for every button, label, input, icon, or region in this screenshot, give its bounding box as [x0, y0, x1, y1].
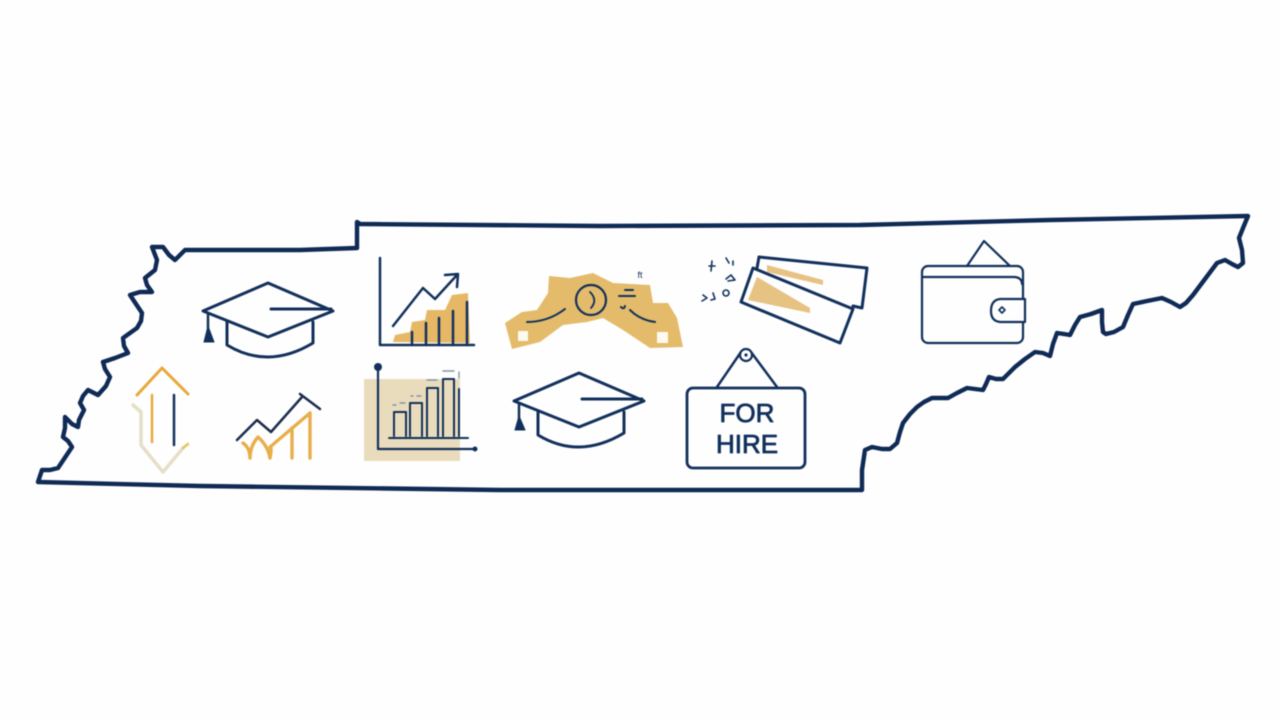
sign text: FOR: [720, 398, 774, 428]
icon: bar chart on tan panel: [364, 363, 478, 461]
icon: gold banner with coin: ft: [637, 270, 643, 280]
icon: trend line with orange peaks: [237, 394, 320, 458]
icon: rising chart with gold staircase: [380, 258, 474, 345]
sign text: HIRE: [716, 429, 778, 459]
sign text: [716, 398, 778, 459]
icon: wallet with card: [922, 241, 1025, 343]
icon: graduation cap, top row: [203, 283, 333, 357]
icon: for hire sign: [687, 349, 805, 468]
icon: stacked bills with scattered marks: [702, 257, 867, 343]
icon: gold banner with coin: [505, 270, 683, 349]
icon: graduation cap, bottom row: [514, 373, 644, 447]
Tennessee state outline: [38, 216, 1248, 490]
icon: up and down arrows: [133, 368, 188, 472]
